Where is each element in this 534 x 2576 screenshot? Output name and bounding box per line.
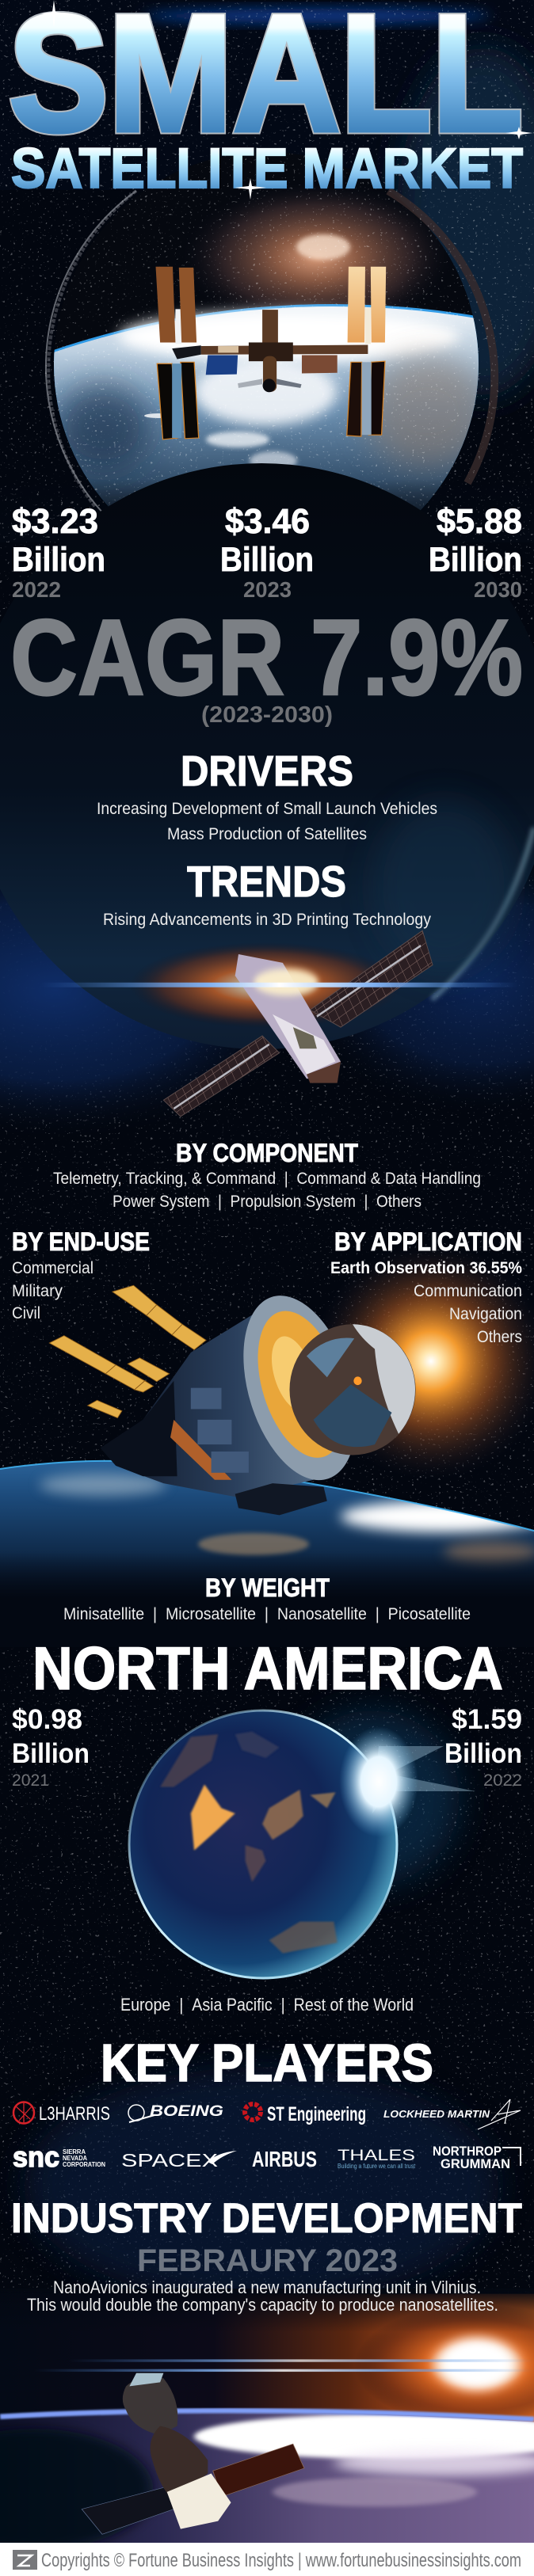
bottom illustration: capsule above earth	[0, 2294, 534, 2550]
stat: 2021: 2021	[12, 1771, 49, 1790]
logo: L3Harris	[13, 2102, 110, 2125]
background: lower blue haze	[24, 2067, 499, 2304]
segmentation: by end-use: Commercial	[12, 1259, 93, 1277]
stat: 2023: Billion	[220, 541, 314, 579]
drivers	[97, 748, 437, 843]
logo: Lockheed Martin: LOCKHEED MARTIN	[383, 2108, 490, 2120]
logo: SNC: NEVADA	[63, 2155, 87, 2162]
icon: title sparkles	[41, 0, 532, 200]
stat: 2021: $0.98	[12, 1704, 82, 1735]
segmentation: by weight: BY WEIGHT	[205, 1573, 330, 1602]
stat: 2022	[12, 502, 105, 602]
footer	[0, 2543, 534, 2576]
trends: Rising Advancements in 3D Printing Technology	[103, 911, 431, 929]
drivers: Increasing Development of Small Launch Vehicles	[97, 800, 437, 818]
segmentation: by component: Power System | Propulsion System | Others	[113, 1193, 421, 1211]
fade into bottom illustration	[0, 2289, 534, 2332]
logo: SNC	[13, 2140, 105, 2173]
icon: capsule	[82, 2373, 304, 2534]
icon: earth at night	[129, 1710, 475, 1978]
market values	[12, 502, 522, 602]
stat: 2022: Billion	[12, 541, 105, 579]
stat: 2023: 2023	[243, 577, 292, 602]
logo: ST Engineering	[245, 2103, 366, 2125]
segmentation: by application: Earth Observation 36.55%	[330, 1259, 522, 1277]
logo: ST Engineering: ST Engineering	[267, 2103, 366, 2125]
stat: 2023	[220, 502, 314, 602]
icon: spacecraft	[49, 1280, 416, 1515]
logo: SNC: snc	[13, 2140, 59, 2173]
stat: 2030: 2030	[474, 577, 522, 602]
industry development: FEBRAURY 2023	[137, 2243, 398, 2278]
segmentation: by end-use	[12, 1227, 150, 1322]
stat: 2030: $5.88	[437, 502, 522, 541]
trends	[103, 857, 431, 929]
icon: Fortune Business Insights logo	[13, 2550, 37, 2570]
segmentation: by application: Communication	[414, 1282, 522, 1300]
logo: Lockheed Martin	[383, 2099, 521, 2129]
stat: 2022: Billion	[444, 1738, 522, 1769]
logo: SNC: CORPORATION	[63, 2161, 105, 2168]
stat: 2022	[444, 1704, 522, 1790]
segmentation: by weight: Minisatellite | Microsatellite | Nanosatellite | Picosatellite	[63, 1605, 471, 1623]
stat: 2022: 2022	[12, 577, 61, 602]
industry development: NanoAvionics inaugurated a new manufacturing unit in Vilnius.	[53, 2277, 481, 2297]
heading: key players: KEY PLAYERS	[101, 2034, 433, 2093]
logo: Boeing: BOEING	[150, 2103, 223, 2120]
segmentation: by component: Telemetry, Tracking, & Command | Command & Data Handling	[53, 1170, 481, 1188]
segmentation: by component: BY COMPONENT	[176, 1139, 358, 1167]
segmentation: by end-use: Civil	[12, 1304, 40, 1322]
logo: Northrop Grumman: NORTHROP	[433, 2144, 502, 2159]
logo: SpaceX	[121, 2150, 237, 2171]
stat: 2021: Billion	[12, 1738, 90, 1769]
icon: space station	[156, 267, 386, 439]
logo: Boeing	[128, 2103, 223, 2122]
logo: SpaceX: SPACEX	[121, 2150, 218, 2171]
industry development	[11, 2195, 522, 2315]
logo: SNC: SIERRA	[63, 2148, 86, 2156]
stat: 2030: Billion	[429, 541, 522, 579]
stat: 2021	[12, 1704, 90, 1790]
background: satellite section 3	[0, 1242, 534, 1647]
logo: Thales: THALES	[338, 2148, 415, 2164]
drivers: DRIVERS	[181, 748, 353, 795]
region: north america: NORTH AMERICA	[32, 1635, 503, 1703]
segmentation: by application: Navigation	[449, 1305, 522, 1323]
segmentation: by application	[330, 1227, 522, 1346]
region: north america: Europe | Asia Pacific | Rest of the World	[120, 1995, 414, 2015]
stat: 2022: $1.59	[452, 1704, 522, 1735]
stat: 2022: $3.23	[12, 502, 98, 541]
hero illustration: space station through window	[44, 2, 534, 1530]
segmentation: by component	[53, 1139, 481, 1211]
region: north america	[12, 1635, 522, 2015]
logo: Airbus: AIRBUS	[252, 2147, 317, 2171]
drivers: Mass Production of Satellites	[167, 825, 367, 843]
trends: TRENDS	[187, 857, 346, 906]
segmentation: by application: Others	[477, 1328, 522, 1346]
logo: Northrop Grumman: GRUMMAN	[441, 2156, 510, 2171]
logo: Northrop Grumman	[433, 2144, 521, 2171]
logo: L3Harris: L3HARRIS	[39, 2103, 110, 2125]
stat: 2030	[429, 502, 522, 602]
icon: satellite with flare	[41, 930, 518, 1117]
logos	[13, 2099, 521, 2173]
segmentation: by weight	[63, 1573, 471, 1623]
CAGR: (2023-2030)	[201, 702, 333, 728]
logo: Thales	[338, 2148, 416, 2170]
stat: 2023: $3.46	[225, 502, 310, 541]
logo: Thales: Building a future we can all trust	[338, 2163, 416, 2170]
segmentation: by end-use: BY END-USE	[12, 1227, 150, 1256]
stat: 2022: 2022	[483, 1771, 522, 1790]
background: dark planet section	[0, 463, 534, 1140]
icon: solar panels	[49, 1285, 206, 1418]
segmentation: by end-use: Military	[12, 1282, 63, 1300]
